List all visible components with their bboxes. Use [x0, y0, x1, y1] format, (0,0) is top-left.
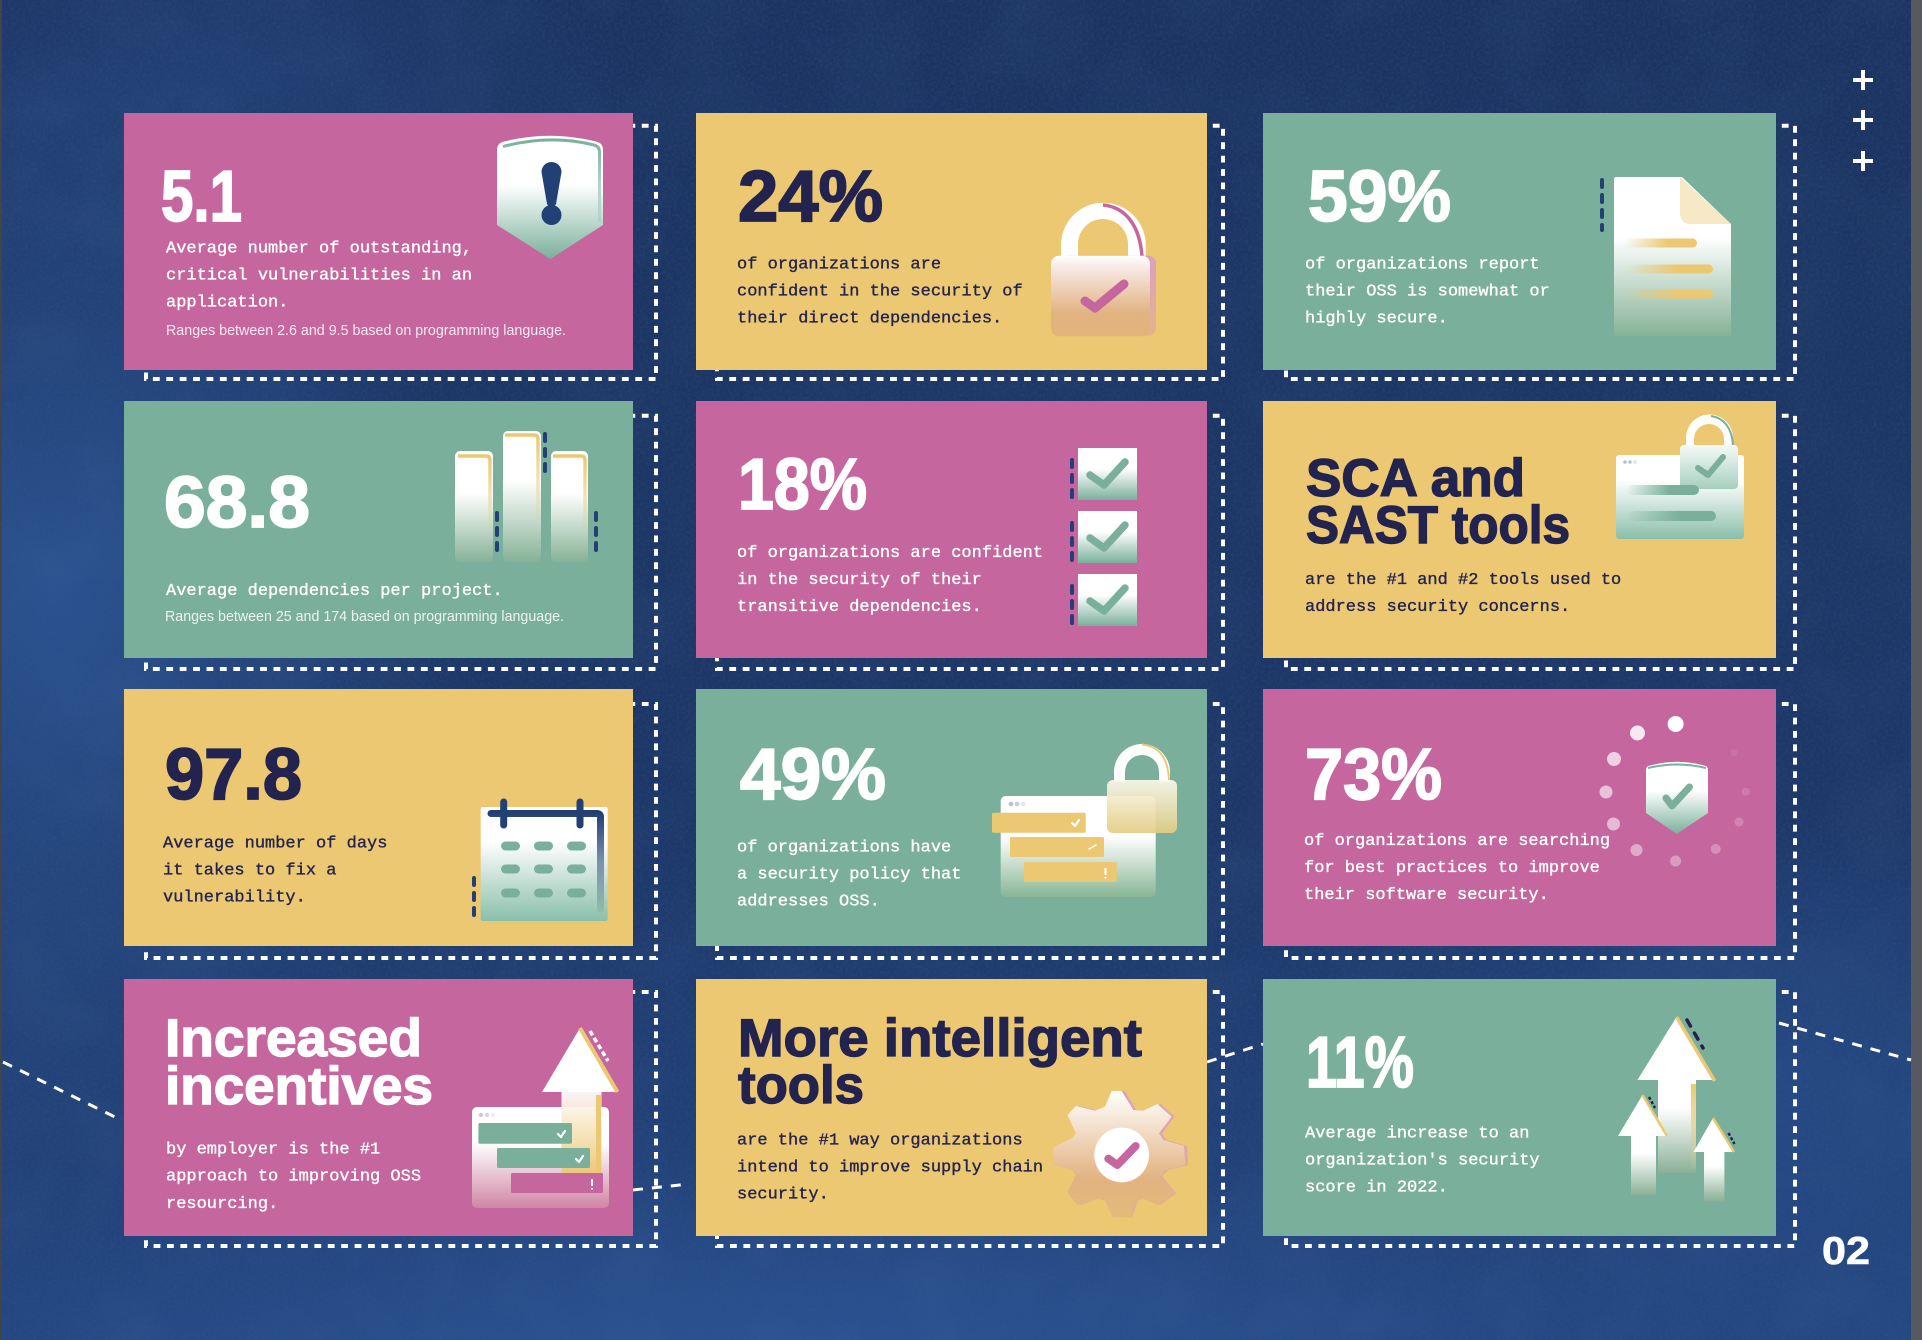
description: are the #1 and #2 tools used to: [1305, 571, 1621, 590]
description: of organizations are confident: [737, 544, 1043, 563]
icon: padlock with check: [1051, 203, 1156, 336]
icon: three checkboxes: [1072, 448, 1137, 626]
panel: 73% best practices: [1263, 689, 1776, 946]
description: of organizations are searching: [1304, 832, 1610, 851]
panel: 18% transitive dependencies: [696, 401, 1207, 658]
description: their direct dependencies.: [737, 310, 1002, 328]
icon: bar chart: [455, 431, 596, 562]
heading: [165, 1009, 433, 1116]
panel: increased incentives: [124, 979, 633, 1236]
heading: [738, 1009, 1142, 1115]
icon: policy window with padlock: [992, 744, 1177, 897]
stat: 68.8: 68.8: [164, 463, 310, 543]
description: [1304, 832, 1610, 905]
description: intend to improve supply chain: [737, 1158, 1043, 1178]
stat: 49%: 49%: [740, 735, 886, 815]
heading: incentives: [165, 1057, 433, 1116]
description: [163, 834, 387, 908]
description: [1305, 256, 1550, 328]
panel: 5.1 vulnerabilities: [124, 113, 633, 370]
description: application.: [166, 294, 288, 312]
stat: 24%: 24%: [738, 157, 883, 237]
description: [1305, 571, 1621, 617]
icon: arrow and task window: [472, 1028, 618, 1208]
heading: More intelligent: [738, 1009, 1142, 1068]
description: transitive dependencies.: [737, 598, 982, 617]
description: critical vulnerabilities in an: [166, 266, 472, 286]
stat: 97.8: 97.8: [165, 735, 302, 815]
description: by employer is the #1: [166, 1140, 380, 1160]
description: [1305, 1124, 1540, 1198]
panel: 97.8 days: [124, 689, 633, 946]
description: [737, 256, 1023, 328]
description: their software security.: [1304, 886, 1549, 905]
icon: shield with exclamation: [497, 136, 603, 259]
heading: SAST tools: [1306, 496, 1570, 555]
description: their OSS is somewhat or: [1305, 282, 1550, 302]
heading: tools: [738, 1056, 864, 1115]
panel: more intelligent tools: [696, 979, 1207, 1236]
description: Average dependencies per project.: [166, 582, 503, 601]
stat: 59%: 59%: [1308, 157, 1451, 237]
description: a security policy that: [737, 866, 961, 884]
heading: [1306, 449, 1570, 555]
description: are the #1 way organizations: [737, 1132, 1023, 1150]
description: [737, 1132, 1043, 1204]
icon: three up arrows: [1618, 1017, 1734, 1201]
panel: 68.8 dependencies: [124, 401, 633, 658]
page number: 02: [1822, 1230, 1870, 1273]
description: for best practices to improve: [1304, 859, 1600, 878]
panel: 24% direct dependencies: [696, 113, 1207, 370]
description: highly secure.: [1305, 310, 1448, 328]
description: [737, 838, 961, 912]
footnote: Ranges between 25 and 174 based on programming language.: [165, 609, 564, 625]
description: of organizations have: [737, 838, 951, 858]
description: [737, 544, 1043, 617]
stat: 11%: 11%: [1306, 1023, 1414, 1103]
description: [166, 240, 472, 312]
icon: window with padlock: [1616, 414, 1744, 539]
description: address security concerns.: [1305, 598, 1570, 617]
panel: 49% security policy: [696, 689, 1207, 946]
description: approach to improving OSS: [166, 1168, 421, 1186]
plus marks: [1853, 70, 1873, 171]
description: of organizations report: [1305, 256, 1540, 274]
description: organization's security: [1305, 1152, 1540, 1170]
heading: Increased: [165, 1009, 422, 1068]
description: addresses OSS.: [737, 892, 880, 912]
description: Average number of outstanding,: [166, 240, 472, 258]
panel: SCA and SAST tools: [1263, 401, 1776, 658]
icon: gear with check: [1053, 1091, 1188, 1217]
description: it takes to fix a: [163, 862, 336, 880]
description: confident in the security of: [737, 282, 1023, 302]
panel: 11% security score: [1263, 979, 1776, 1236]
description: Average number of days: [163, 834, 387, 854]
description: resourcing.: [166, 1195, 278, 1214]
icon: shield with progress dots: [1600, 716, 1750, 866]
description: security.: [737, 1186, 829, 1204]
stat: 5.1: 5.1: [161, 157, 242, 237]
footnote: Ranges between 2.6 and 9.5 based on programming language.: [166, 323, 566, 339]
description: vulnerability.: [163, 888, 306, 908]
description: [166, 1140, 421, 1214]
description: of organizations are: [737, 256, 941, 274]
description: Average increase to an: [1305, 1124, 1529, 1144]
icon: document: [1602, 177, 1731, 336]
description: score in 2022.: [1305, 1178, 1448, 1198]
heading: SCA and: [1306, 449, 1525, 508]
stat: 73%: 73%: [1305, 735, 1442, 815]
stat: 18%: 18%: [738, 445, 867, 525]
panel: 59% somewhat secure: [1263, 113, 1776, 370]
icon: calendar: [474, 802, 608, 921]
description: in the security of their: [737, 571, 982, 590]
